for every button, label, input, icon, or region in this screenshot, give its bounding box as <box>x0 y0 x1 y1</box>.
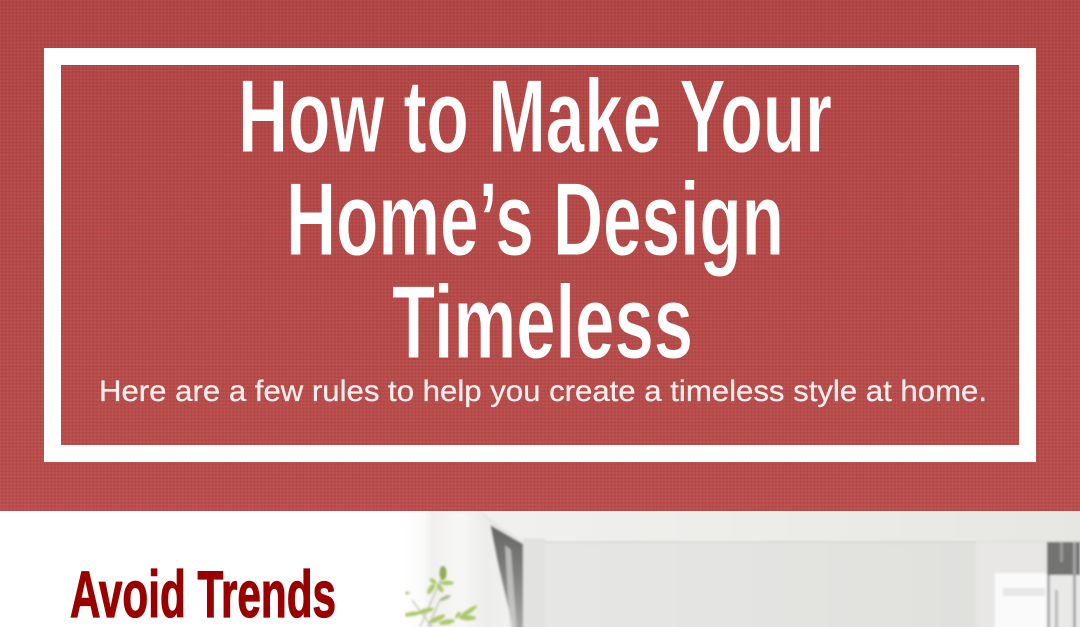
plant <box>404 566 478 627</box>
side wall pillar <box>524 538 544 542</box>
subtitle: Here are a few rules to help you create a timeless style at home. <box>99 375 987 408</box>
white section background <box>0 511 405 627</box>
right sheer curtain <box>978 542 1046 572</box>
left gray curtain <box>490 525 523 627</box>
room photo <box>400 505 1080 627</box>
left sheer curtain <box>400 505 514 627</box>
window glow <box>995 573 1048 627</box>
white title frame <box>44 48 1036 462</box>
title: Home’s Design <box>286 162 784 278</box>
title: Timeless <box>392 265 693 381</box>
back wall <box>478 511 1080 627</box>
ceiling <box>484 511 954 540</box>
title <box>238 59 832 381</box>
right gray curtain <box>1047 542 1080 575</box>
